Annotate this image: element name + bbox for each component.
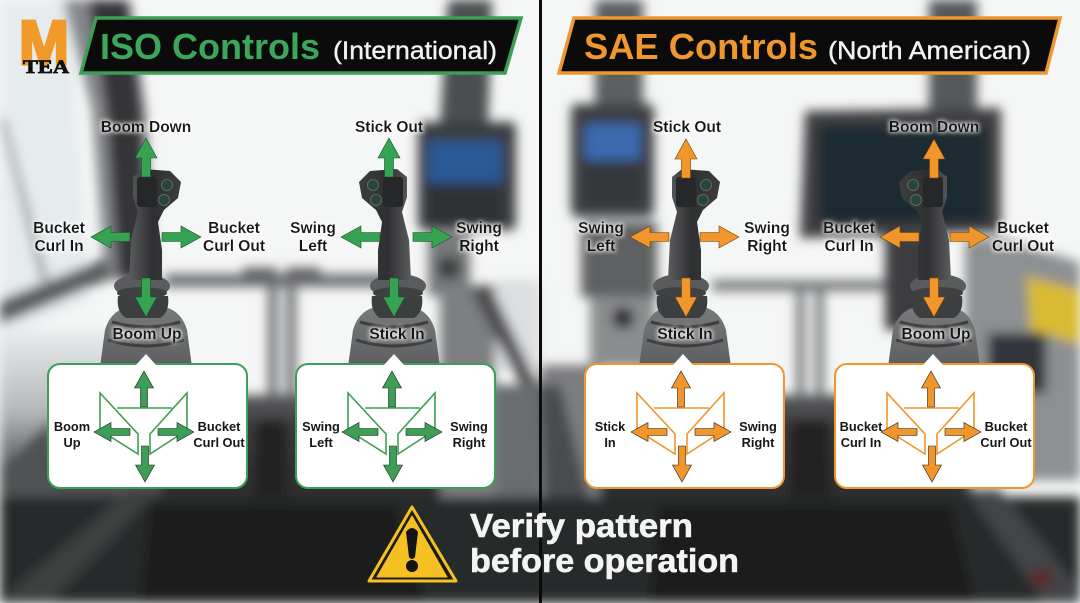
joystick: ISO left — [100, 169, 192, 367]
arrows: SAE left joystick — [630, 139, 739, 317]
panel: SAE right pattern diagram: Bucket — [985, 419, 1028, 434]
heading: SAE controls banner — [559, 18, 1060, 73]
labels: SAE left joystick: Stick Out — [653, 119, 721, 136]
joystick: SAE left — [639, 169, 731, 367]
labels: ISO left joystick: Boom Down — [101, 119, 191, 136]
right lower — [540, 365, 600, 505]
labels: SAE left joystick: Swing — [578, 220, 624, 237]
panel: SAE left pattern diagram: Stick — [595, 419, 626, 434]
logo: M TEA: M — [19, 9, 69, 78]
labels: ISO right joystick: Stick Out — [355, 119, 423, 136]
labels: ISO left joystick: Bucket — [208, 220, 260, 237]
center divider — [539, 0, 542, 603]
labels: ISO left joystick: Curl Out — [203, 238, 265, 255]
panel: ISO right pattern diagram: Right — [453, 435, 486, 450]
labels: SAE left joystick — [578, 119, 790, 343]
panel: SAE right pattern diagram: Curl Out — [980, 435, 1032, 450]
labels: ISO right joystick: Stick In — [369, 326, 425, 343]
arrows: SAE right joystick — [880, 139, 989, 317]
labels: SAE left joystick: Right — [747, 238, 787, 255]
panel: ISO right pattern diagram: Left — [309, 435, 333, 450]
panel: ISO left pattern diagram: Boom — [54, 419, 90, 434]
callout: verify pattern before operation: before operation — [470, 542, 739, 579]
heading: SAE controls banner: SAE Controls — [584, 26, 818, 67]
labels: ISO right joystick: Right — [459, 238, 499, 255]
heading: SAE controls banner: (North American) — [828, 37, 1031, 65]
heading: ISO controls banner: ISO Controls — [100, 26, 320, 67]
panel: SAE left pattern diagram — [585, 354, 784, 488]
heading: ISO controls banner — [81, 18, 521, 73]
panel: ISO left pattern diagram: Up — [63, 435, 81, 450]
labels: ISO left joystick — [33, 119, 265, 343]
labels: SAE right joystick: Bucket — [823, 220, 875, 237]
logo: M TEA: TEA — [23, 57, 69, 78]
arrows: ISO right joystick — [341, 138, 452, 317]
labels: ISO right joystick: Swing — [456, 220, 502, 237]
labels: SAE left joystick: Left — [587, 238, 615, 255]
panel: SAE right pattern diagram: Curl In — [841, 435, 881, 450]
panel: ISO right pattern diagram — [296, 354, 495, 488]
callout: verify pattern before operation: Verify pattern — [470, 507, 693, 544]
labels: ISO left joystick: Boom Up — [113, 326, 181, 343]
labels: SAE right joystick: Boom Down — [889, 119, 979, 136]
heading: ISO controls banner: (International) — [333, 37, 497, 65]
callout: verify pattern before operation — [470, 507, 739, 579]
labels: ISO right joystick — [290, 119, 502, 343]
panel: SAE right pattern diagram: Bucket — [840, 419, 883, 434]
right half upper — [595, 0, 643, 110]
panel: SAE left pattern diagram: In — [604, 435, 616, 450]
labels: SAE right joystick — [823, 119, 1054, 343]
bottom floor and seat — [0, 497, 1080, 603]
panel: ISO left pattern diagram: Bucket — [198, 419, 241, 434]
labels: SAE right joystick: Curl In — [824, 238, 874, 255]
left half upper — [0, 0, 90, 340]
joystick: ISO right — [348, 169, 440, 367]
labels: ISO right joystick: Left — [299, 238, 327, 255]
panel: SAE left pattern diagram: Right — [742, 435, 775, 450]
panel: SAE right pattern diagram — [835, 354, 1034, 488]
panel: SAE left pattern diagram: Swing — [739, 419, 777, 434]
labels: SAE right joystick: Boom Up — [902, 326, 970, 343]
labels: SAE left joystick: Swing — [744, 220, 790, 237]
left lower — [0, 330, 170, 510]
panel: ISO right pattern diagram: Swing — [450, 419, 488, 434]
joystick: SAE right — [888, 169, 980, 367]
labels: ISO right joystick: Swing — [290, 220, 336, 237]
labels: ISO left joystick: Curl In — [34, 238, 84, 255]
panel: ISO left pattern diagram: Curl Out — [193, 435, 245, 450]
labels: SAE right joystick: Bucket — [997, 220, 1049, 237]
icon: warning triangle — [369, 507, 456, 581]
panel: ISO left pattern diagram — [48, 354, 247, 488]
labels: SAE right joystick: Curl Out — [992, 238, 1054, 255]
labels: ISO left joystick: Bucket — [33, 220, 85, 237]
panel: ISO right pattern diagram: Swing — [302, 419, 340, 434]
labels: SAE left joystick: Stick In — [657, 326, 713, 343]
arrows: ISO left joystick — [91, 138, 201, 317]
